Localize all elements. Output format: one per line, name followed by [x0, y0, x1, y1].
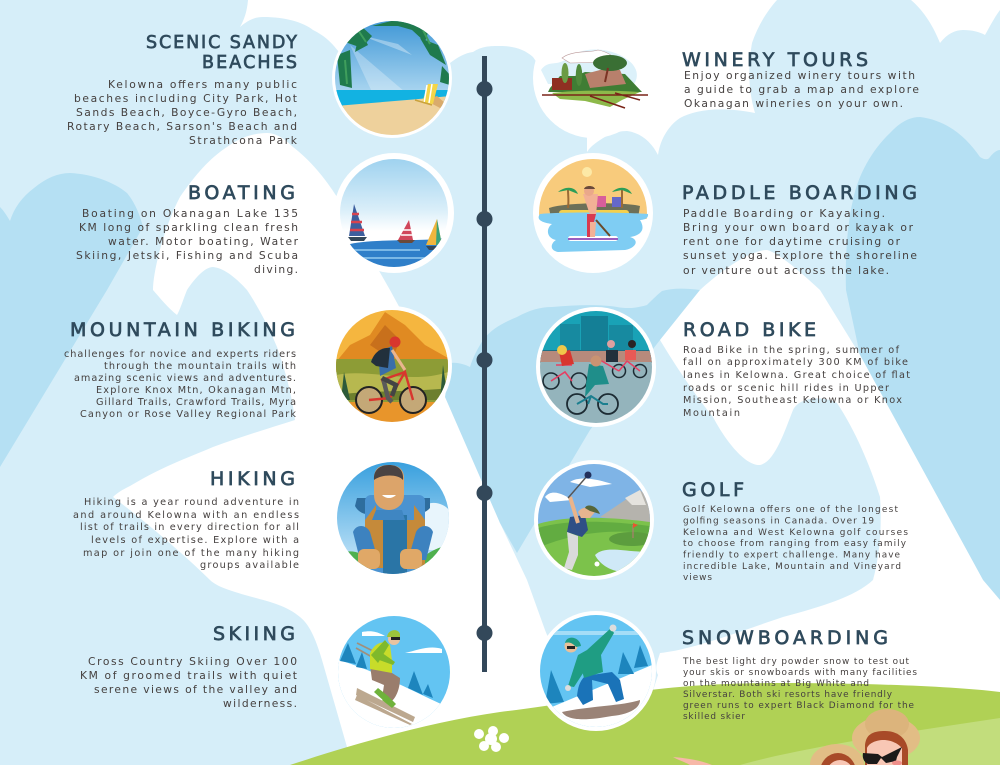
heading and text: golf: friendly to expert challenge. Many have	[683, 550, 900, 560]
heading and text: hiking: groups available	[200, 560, 299, 571]
heading and text: mountain biking: Explore Knox Mtn, Okanagan Mtn,	[96, 385, 296, 396]
illustration: couple in hats	[673, 709, 920, 765]
heading and text: winery tours: WINERY TOURS	[682, 49, 868, 71]
heading and text: road bike: Road Bike in the spring, summer of	[683, 345, 900, 356]
heading and text: mountain biking: Gillard Trails, Crawford Trails, Myra	[96, 397, 296, 408]
heading and text: hiking: and around Kelowna with an endless	[73, 510, 299, 521]
heading and text: snowboarding: Silverstar. Both ski resorts have friendly	[683, 690, 892, 700]
heading and text: boating: KM long of sparkling clean fresh	[79, 221, 298, 234]
heading and text: mountain biking	[64, 319, 296, 420]
heading and text: paddle boarding: sunset yoga. Explore the shoreline	[683, 249, 917, 262]
heading and text: paddle boarding: or venture out across the lake.	[683, 264, 889, 277]
heading and text: boating	[76, 182, 299, 276]
heading and text: scenic sandy beaches: beaches including City Park, Hot	[74, 92, 297, 105]
heading and text: snowboarding: skilled skier	[683, 712, 745, 722]
heading and text: paddle boarding: PADDLE BOARDING	[682, 182, 917, 204]
heading and text: paddle boarding: rent one for daytime cruising or	[683, 235, 901, 248]
heading and text: snowboarding: your skis or snowboards with many facilities	[683, 668, 917, 678]
heading and text: boating: Boating on Okanagan Lake 135	[82, 207, 298, 220]
heading and text: paddle boarding: Paddle Boarding or Kayaking.	[683, 207, 885, 220]
heading and text: road bike: Mountain	[683, 408, 740, 419]
heading and text: winery tours: a guide to grab a map and explore	[684, 83, 919, 96]
heading and text: hiking	[73, 468, 299, 571]
heading and text: road bike: fall on approximately 300 KM of bike	[683, 357, 908, 368]
heading and text: road bike	[683, 319, 910, 419]
heading and text: boating: Skiing, Jetski, Fishing and Scuba	[76, 249, 298, 262]
heading and text: winery tours: Okanagan wineries on your own.	[684, 97, 903, 110]
heading and text: golf: Golf Kelowna offers one of the longest	[683, 505, 899, 515]
heading and text: winery tours	[682, 49, 919, 110]
heading and text: snowboarding: green runs to expert Black Diamond for the	[683, 701, 914, 711]
heading and text: scenic sandy beaches: BEACHES	[202, 53, 297, 73]
heading and text: road bike: Mission, Southeast Kelowna or Knox	[683, 395, 902, 406]
heading and text: hiking: levels of expertise. Explore with a	[91, 535, 299, 546]
heading and text: golf: GOLF	[682, 479, 744, 501]
icon: paddle boarder	[533, 153, 653, 273]
heading and text: scenic sandy beaches: Kelowna offers many public	[108, 78, 297, 91]
heading and text: snowboarding: The best light dry powder snow to test out	[682, 657, 910, 667]
icon: snowboarder	[536, 611, 656, 735]
icon: sailboats	[334, 153, 454, 273]
heading and text: hiking: Hiking is a year round adventure in	[84, 497, 299, 508]
heading and text: skiing: KM of groomed trails with quiet	[80, 669, 297, 682]
heading and text: golf: golfing seasons in Canada. Over 19	[683, 516, 874, 526]
timeline	[476, 56, 492, 672]
heading and text: hiking: map or join one of the many hiking	[83, 548, 299, 559]
heading and text: winery tours: Enjoy organized winery tours with	[684, 69, 915, 82]
heading and text: snowboarding: on the mountains at Big White and	[683, 679, 869, 689]
heading and text: golf: incredible Lake, Mountain and Vineyard	[683, 562, 901, 572]
heading and text: golf: Kelowna and West Kelowna golf courses	[683, 528, 908, 538]
heading and text: snowboarding: SNOWBOARDING	[682, 627, 888, 649]
icon: road cyclists	[536, 307, 656, 427]
heading and text: scenic sandy beaches: Strathcona Park	[189, 134, 298, 147]
heading and text: scenic sandy beaches	[67, 33, 298, 147]
heading and text: mountain biking: MOUNTAIN BIKING	[70, 319, 295, 341]
heading and text: scenic sandy beaches: Rotary Beach, Sarson's Beach and	[67, 120, 297, 133]
heading and text: snowboarding	[682, 627, 917, 722]
heading and text: scenic sandy beaches: SCENIC SANDY	[146, 33, 297, 53]
heading and text: mountain biking: amazing scenic views and adventures.	[74, 373, 296, 384]
heading and text: paddle boarding	[682, 182, 917, 277]
heading and text: scenic sandy beaches: Sands Beach, Boyce-Gyro Beach,	[76, 106, 297, 119]
heading and text: skiing: serene views of the valley and	[94, 683, 297, 696]
heading and text: boating: BOATING	[188, 182, 295, 204]
heading and text: skiing: SKIING	[213, 623, 295, 645]
icon: beach	[332, 18, 452, 140]
heading and text: paddle boarding: Bring your own board or kayak or	[683, 221, 914, 234]
heading and text: road bike: ROAD BIKE	[683, 319, 816, 341]
icon: hiker	[337, 462, 449, 575]
heading and text: mountain biking: through the mountain trails with	[104, 361, 296, 372]
heading and text: skiing: Cross Country Skiing Over 100	[88, 655, 297, 668]
icon: golfer	[534, 460, 655, 580]
heading and text: hiking: list of trails in every direction for all	[80, 522, 299, 533]
heading and text: skiing	[80, 623, 297, 710]
icon: winery	[533, 18, 653, 138]
icon: skier	[338, 616, 450, 730]
heading and text: road bike: roads or scenic hill rides in Upper	[683, 383, 889, 394]
heading and text: hiking: HIKING	[210, 468, 295, 490]
heading and text: mountain biking: Canyon or Rose Valley Regional Park	[80, 409, 296, 420]
heading and text: golf: views	[683, 573, 712, 583]
heading and text: mountain biking: challenges for novice and experts riders	[64, 349, 296, 360]
heading and text: skiing: wilderness.	[223, 697, 297, 710]
heading and text: boating: water. Motor boating, Water	[108, 235, 299, 248]
icon: mountain biker	[332, 306, 452, 426]
heading and text: golf	[682, 479, 908, 583]
heading and text: road bike: lanes in Kelowna. Great choice of flat	[683, 370, 910, 381]
icon: flower	[474, 726, 509, 752]
heading and text: boating: diving.	[254, 263, 298, 276]
heading and text: golf: to choose from ranging from easy family	[683, 539, 906, 549]
